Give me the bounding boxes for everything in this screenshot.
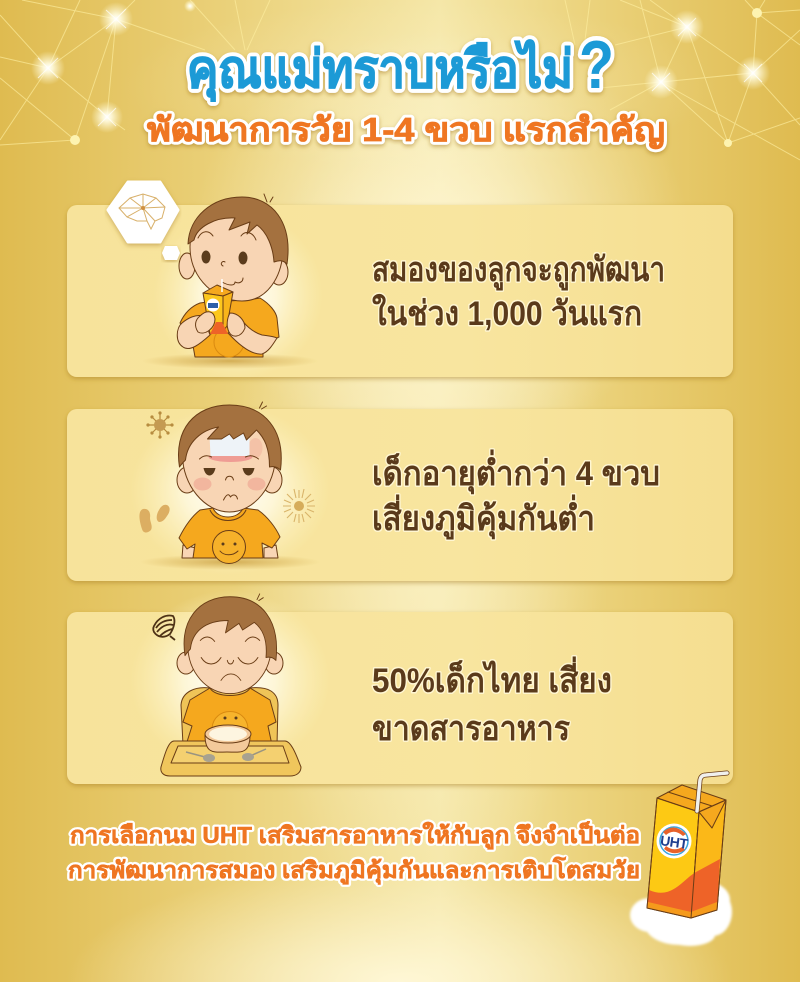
high chair tray	[161, 741, 301, 776]
bowl	[205, 735, 250, 752]
panel: nutrient deficiency	[67, 590, 733, 784]
panel: brain development: ในช่วง 1,000 วันแรก	[372, 293, 642, 333]
icon: milk carton in hands	[203, 279, 233, 334]
closing message	[68, 820, 640, 885]
title: ?	[579, 27, 614, 103]
glow behind child	[130, 405, 330, 575]
ground shadow	[140, 554, 320, 570]
glow behind child	[153, 210, 323, 380]
icon: scribble of frustration	[153, 615, 175, 640]
icon: UHT milk carton on cloud	[630, 773, 732, 946]
closing message: การเลือกนม UHT เสริมสารอาหารให้กับลูก จึงจำเป็นต่อ	[70, 820, 640, 850]
panel: low immunity: เสี่ยงภูมิคุ้มกันต่ำ	[372, 494, 595, 540]
decoration: glowing stars	[31, 0, 770, 147]
icon: UHT milk carton on cloud: UHT	[659, 832, 689, 852]
icon: peanuts	[139, 505, 170, 533]
icon: tired boy at high chair	[161, 594, 301, 776]
text: สมองของลูกจะถูกพัฒนา	[372, 251, 665, 291]
title: คุณแม่ทราบหรือไม่	[187, 39, 573, 102]
closing message: การพัฒนาการสมอง เสริมภูมิคุ้มกันและการเติบโตสมวัย	[68, 856, 640, 885]
closing message: การเลือกนม UHT เสริมสารอาหารให้กับลูก จึงจำเป็นต่อ	[70, 820, 640, 850]
text: 50%เด็กไทย เสี่ยง	[372, 656, 612, 700]
subtitle: พัฒนาการวัย 1-4 ขวบ แรกสำคัญ	[147, 111, 665, 149]
panel: low immunity	[67, 402, 733, 581]
icon: pollen	[283, 489, 315, 523]
icon: thought bubble with brain	[108, 182, 180, 260]
subtitle: พัฒนาการวัย 1-4 ขวบ แรกสำคัญ	[147, 111, 665, 149]
icon: boy drinking milk	[177, 194, 288, 357]
panel: brain development	[67, 182, 733, 380]
spoons	[186, 752, 205, 757]
ground shadow	[142, 353, 318, 369]
icon: sick boy	[177, 402, 282, 564]
decoration: star network lines	[0, 0, 800, 160]
glow behind child	[130, 590, 330, 770]
title: คุณแม่ทราบหรือไม่	[187, 39, 573, 102]
icon: virus	[147, 412, 173, 438]
closing message: การพัฒนาการสมอง เสริมภูมิคุ้มกันและการเติบโตสมวัย	[68, 856, 640, 885]
panel: nutrient deficiency: ขาดสารอาหาร	[372, 710, 571, 748]
text: เด็กอายุต่ำกว่า 4 ขวบ	[372, 449, 660, 495]
